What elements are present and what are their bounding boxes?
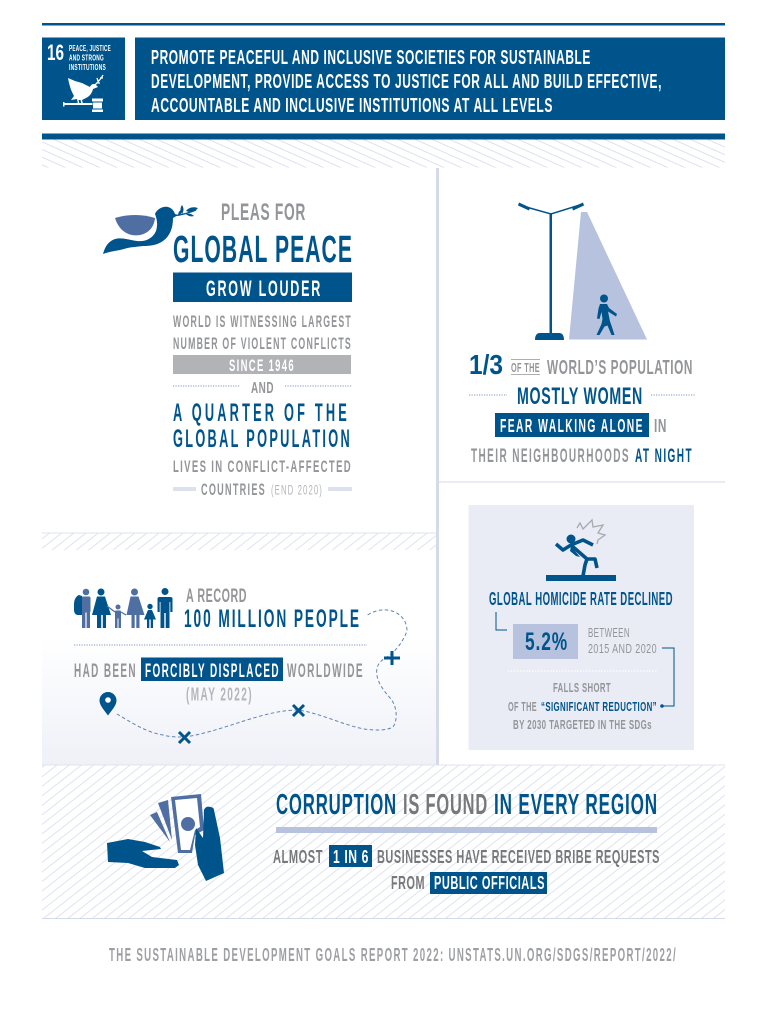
heading: PLEAS FOR (221, 199, 306, 226)
quarter of population: GLOBAL POPULATION (173, 425, 352, 453)
quarter of population: A QUARTER OF THE (173, 399, 350, 427)
falls short text: OF THE (508, 699, 537, 714)
falls short text: BY 2030 TARGETED IN THE SDGs (513, 717, 652, 732)
icon: falling figure (546, 520, 616, 581)
violent conflicts text: WORLD IS WITNESSING LARGEST (173, 312, 352, 331)
bribe statistic text (273, 845, 660, 894)
icon: family group (74, 588, 172, 628)
bribe statistic text: 1 IN 6 (333, 847, 369, 867)
icon: hand passing bribe (107, 794, 224, 881)
fear statistic text: 1/3 (469, 349, 503, 380)
right panel divider (438, 482, 725, 483)
period text (588, 625, 657, 656)
SDG 16 tile (42, 38, 125, 120)
icon: street lamp and pedestrian (518, 202, 647, 340)
bribe statistic text: FROM (391, 873, 425, 893)
conflict-affected text: COUNTRIES (201, 480, 266, 499)
panel: corruption (42, 764, 725, 919)
fear statistic text: MOSTLY WOMEN (517, 383, 643, 410)
icon: location pin (100, 692, 116, 716)
header base bar (42, 134, 725, 140)
displaced text: (MAY 2022) (186, 684, 253, 704)
panel: global peace (103, 199, 353, 499)
connector line (496, 612, 507, 630)
quarter of population (173, 399, 352, 453)
fear statistic text: THEIR NEIGHBOURHOODS (471, 446, 630, 467)
bribe statistic text: ALMOST (273, 847, 323, 867)
conflict-affected text: LIVES IN CONFLICT-AFFECTED (173, 457, 352, 476)
falls short text: “SIGNIFICANT REDUCTION” (541, 699, 657, 714)
bracket connector (660, 648, 674, 708)
icon: route crosses (179, 651, 400, 743)
fear statistic text (469, 349, 695, 467)
since 1946 banner: SINCE 1946 (229, 357, 295, 375)
panel: street lighting (469, 202, 695, 467)
corruption heading: CORRUPTION (276, 789, 397, 821)
bribe statistic text: PUBLIC OFFICIALS (434, 873, 545, 893)
displaced text: HAD BEEN (74, 661, 137, 682)
fear statistic text: FEAR WALKING ALONE (500, 416, 644, 436)
violent conflicts text (173, 312, 352, 353)
and divider: AND (251, 380, 274, 397)
displaced text: 100 MILLION PEOPLE (184, 605, 361, 633)
SDG 16 tile: PEACE, JUSTICE (69, 43, 111, 53)
conflict-affected text: (END 2020) (271, 482, 323, 498)
stat: 5.2%: 5.2% (525, 628, 568, 656)
route: dashed journey line (100, 610, 407, 743)
corruption heading: IS FOUND (403, 789, 488, 821)
period text: BETWEEN (588, 625, 630, 640)
heading: GLOBAL PEACE (173, 229, 353, 271)
displaced text (74, 586, 367, 704)
heading (173, 199, 353, 271)
icon: dove with olive branch (103, 205, 198, 254)
displaced text: FORCIBLY DISPLACED (145, 661, 280, 682)
stat: 5.2% (513, 624, 578, 659)
grow louder banner: GROW LOUDER (206, 276, 322, 301)
centre divider (436, 168, 439, 765)
fear statistic text: AT NIGHT (635, 446, 693, 467)
SDG 16 tile: AND STRONG (69, 52, 104, 62)
panel: homicide rate (468, 505, 694, 750)
displaced text: A RECORD (186, 586, 247, 607)
panel: displacement (42, 532, 436, 765)
header banner (135, 38, 725, 120)
fear statistic text: IN (654, 416, 667, 436)
falls short text: FALLS SHORT (553, 680, 611, 695)
conflict-affected text (173, 457, 352, 499)
since 1946 banner (173, 355, 351, 375)
period text: 2015 AND 2020 (588, 641, 657, 656)
violent conflicts text: NUMBER OF VIOLENT CONFLICTS (173, 334, 352, 353)
SDG 16 tile: 16 (47, 40, 64, 65)
corruption heading: IN EVERY REGION (494, 789, 658, 821)
SDG 16 tile: INSTITUTIONS (69, 62, 106, 72)
top rule (42, 23, 725, 26)
hatch band: top (42, 140, 725, 168)
fear statistic text: OF THE (511, 360, 540, 375)
displaced text: WORLDWIDE (287, 661, 364, 682)
falls short text (508, 680, 657, 732)
corruption heading (276, 789, 658, 821)
grow louder banner (173, 272, 352, 302)
